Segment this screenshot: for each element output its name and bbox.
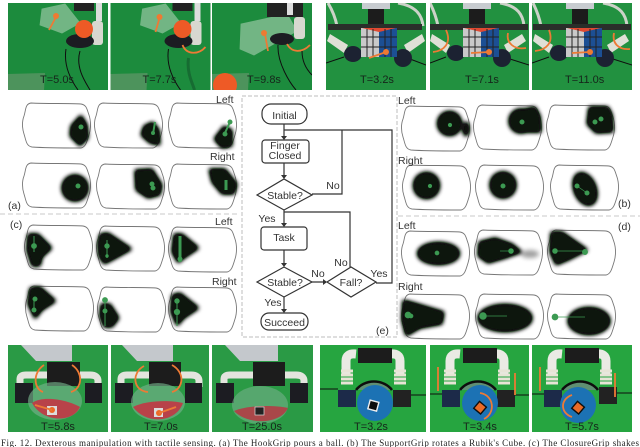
photo row: SupportGrip rotates a Rubik's Cube (326, 3, 632, 90)
photo: T=5.0s: T=5.0s (40, 74, 74, 86)
arrowheads (281, 136, 327, 313)
photo: T=7.0s (111, 345, 209, 433)
photo: T=3.2s cap: T=3.2s (354, 421, 388, 433)
connector lines (284, 124, 392, 312)
labels: branches: Yes (264, 297, 282, 309)
node: Succeed: Succeed (264, 317, 305, 329)
node: Finger Closed (262, 140, 309, 163)
node: Initial (262, 104, 307, 124)
labels: branches: Yes (258, 213, 276, 225)
panel d: tactile maps, ClosureGrip shake (398, 220, 631, 339)
photo: T=3.2s cap (320, 345, 426, 433)
photo row: HookGrip pours a ball (8, 3, 312, 97)
node: Initial: Initial (272, 110, 297, 122)
label: Right: Right (398, 281, 423, 293)
photo: T=7.0s: T=7.0s (144, 421, 178, 433)
label: Left: Left (216, 94, 234, 106)
photo: T=7.7s (110, 3, 210, 90)
label: Right: Right (398, 155, 423, 167)
photo: T=3.4s cap (430, 345, 529, 433)
label: Left: Left (398, 220, 416, 232)
label: (b): (b) (618, 198, 631, 210)
photo: T=3.2s: T=3.2s (360, 74, 394, 86)
photo: T=5.8s (8, 345, 108, 433)
labels: branches: No (311, 268, 325, 280)
photo: T=5.0s (8, 3, 108, 90)
label: (d): (d) (618, 221, 631, 233)
photo: T=3.4s cap: T=3.4s (463, 421, 497, 433)
label: Left: Left (215, 216, 233, 228)
panel e: flowchart (242, 96, 397, 337)
photo: T=5.7s cap (532, 345, 632, 433)
labels: branches (258, 180, 388, 309)
photo row: ClosureGrip shakes (8, 345, 313, 433)
panel a: tactile maps, HookGrip (8, 94, 237, 212)
photo: T=3.2s (326, 3, 426, 90)
label: Left: Left (398, 95, 416, 107)
panel b: tactile maps, SupportGrip (398, 95, 631, 210)
photo: T=25.0s: T=25.0s (242, 421, 283, 433)
decision: Stable? (257, 267, 312, 297)
photo: T=7.1s (430, 3, 529, 90)
label: (c): (c) (10, 219, 22, 231)
decision: Fall?: Fall? (340, 277, 363, 289)
label: Right: Right (212, 276, 237, 288)
photo: T=7.1s: T=7.1s (465, 74, 499, 86)
photo: T=11.0s: T=11.0s (565, 74, 605, 86)
labels: branches: Yes (370, 268, 388, 280)
photo: T=25.0s (212, 345, 313, 433)
decision: Stable?: Stable? (267, 190, 303, 202)
labels: branches: No (326, 180, 340, 192)
photo: T=11.0s (532, 3, 632, 90)
label: (e): (e) (376, 325, 389, 337)
photo: T=7.7s: T=7.7s (142, 74, 177, 86)
photo: T=9.8s: T=9.8s (247, 74, 281, 86)
node: Succeed (261, 313, 308, 330)
photo: T=5.7s cap: T=5.7s (565, 421, 599, 433)
label: (a): (a) (8, 200, 21, 212)
decision: Stable? (257, 179, 312, 210)
decision: Stable?: Stable? (267, 277, 303, 289)
label: Right: Right (210, 151, 235, 163)
node: Task: Task (273, 232, 296, 244)
photo: T=5.8s: T=5.8s (41, 421, 75, 433)
photo: T=9.8s (212, 3, 312, 90)
panel c: tactile maps, ClosureGrip (10, 216, 237, 332)
labels: branches: No (334, 257, 348, 269)
decision: Fall? (327, 267, 376, 297)
node: Finger Closed: Closed (269, 150, 302, 162)
node: Task (261, 227, 307, 250)
node: Finger Closed: Finger (270, 140, 300, 152)
